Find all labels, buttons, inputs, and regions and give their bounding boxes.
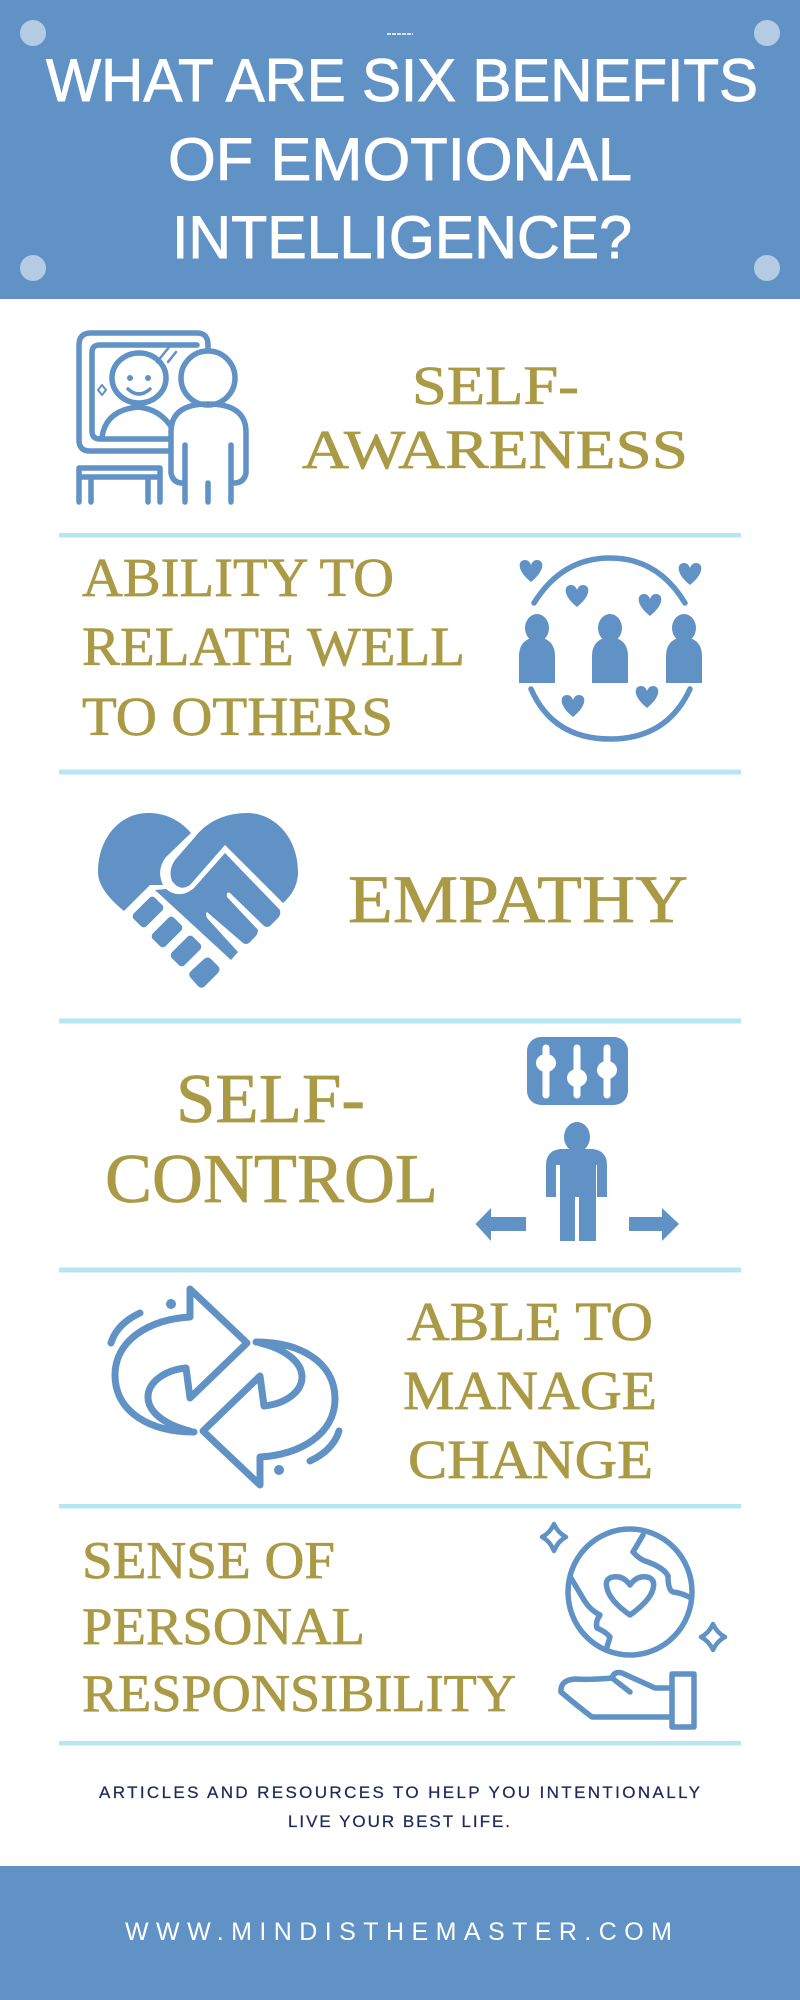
label: able to manage change	[403, 1291, 657, 1490]
divider 2	[59, 770, 741, 774]
divider 1	[59, 533, 741, 538]
label: ability to relate well to others: RELATE WELL	[82, 616, 465, 677]
title: OF EMOTIONAL	[168, 126, 632, 193]
label: self-awareness: SELF-	[412, 355, 579, 416]
label: sense of personal responsibility: PERSONAL	[82, 1598, 365, 1656]
label: sense of personal responsibility: SENSE OF	[82, 1532, 335, 1590]
label: self-control: CONTROL	[105, 1141, 438, 1218]
label: sense of personal responsibility	[82, 1532, 516, 1723]
label: able to manage change: ABLE TO	[407, 1291, 653, 1352]
label: self-control	[105, 1061, 438, 1218]
icon: people with hearts	[519, 558, 702, 739]
header banner	[0, 0, 800, 299]
icon: handshake heart	[98, 813, 298, 988]
title: INTELLIGENCE?	[172, 204, 632, 271]
label: ability to relate well to others: TO OTHERS	[82, 686, 393, 747]
tagline	[99, 1783, 700, 1831]
label: self-awareness: AWARENESS	[302, 419, 688, 480]
label: self-control: SELF-	[176, 1061, 365, 1138]
divider 4	[59, 1268, 741, 1272]
label: empathy: EMPATHY	[348, 861, 688, 937]
footer banner	[0, 1866, 800, 2000]
tagline: LIVE YOUR BEST LIFE.	[288, 1812, 510, 1831]
icon: person with arrows	[476, 1122, 679, 1241]
divider 5	[59, 1504, 741, 1508]
label: ability to relate well to others: ABILITY TO	[82, 547, 394, 608]
icon: globe in hand	[542, 1524, 725, 1727]
divider 6	[59, 1741, 741, 1746]
label: able to manage change: MANAGE	[403, 1360, 657, 1421]
title	[46, 47, 758, 271]
tagline: ARTICLES AND RESOURCES TO HELP YOU INTENTIONALLY	[99, 1783, 700, 1802]
label: sense of personal responsibility: RESPONSIBILITY	[82, 1665, 516, 1723]
label: self-awareness	[302, 355, 688, 480]
label: able to manage change: CHANGE	[408, 1429, 653, 1490]
footer banner: WWW.MINDISTHEMASTER.COM	[125, 1918, 672, 1946]
title: WHAT ARE SIX BENEFITS	[46, 47, 758, 114]
icon: sliders panel	[527, 1037, 628, 1105]
icon: change arrows	[111, 1289, 339, 1485]
icon: person at mirror	[79, 333, 246, 502]
divider 3	[59, 1018, 741, 1024]
label: ability to relate well to others	[82, 547, 465, 747]
